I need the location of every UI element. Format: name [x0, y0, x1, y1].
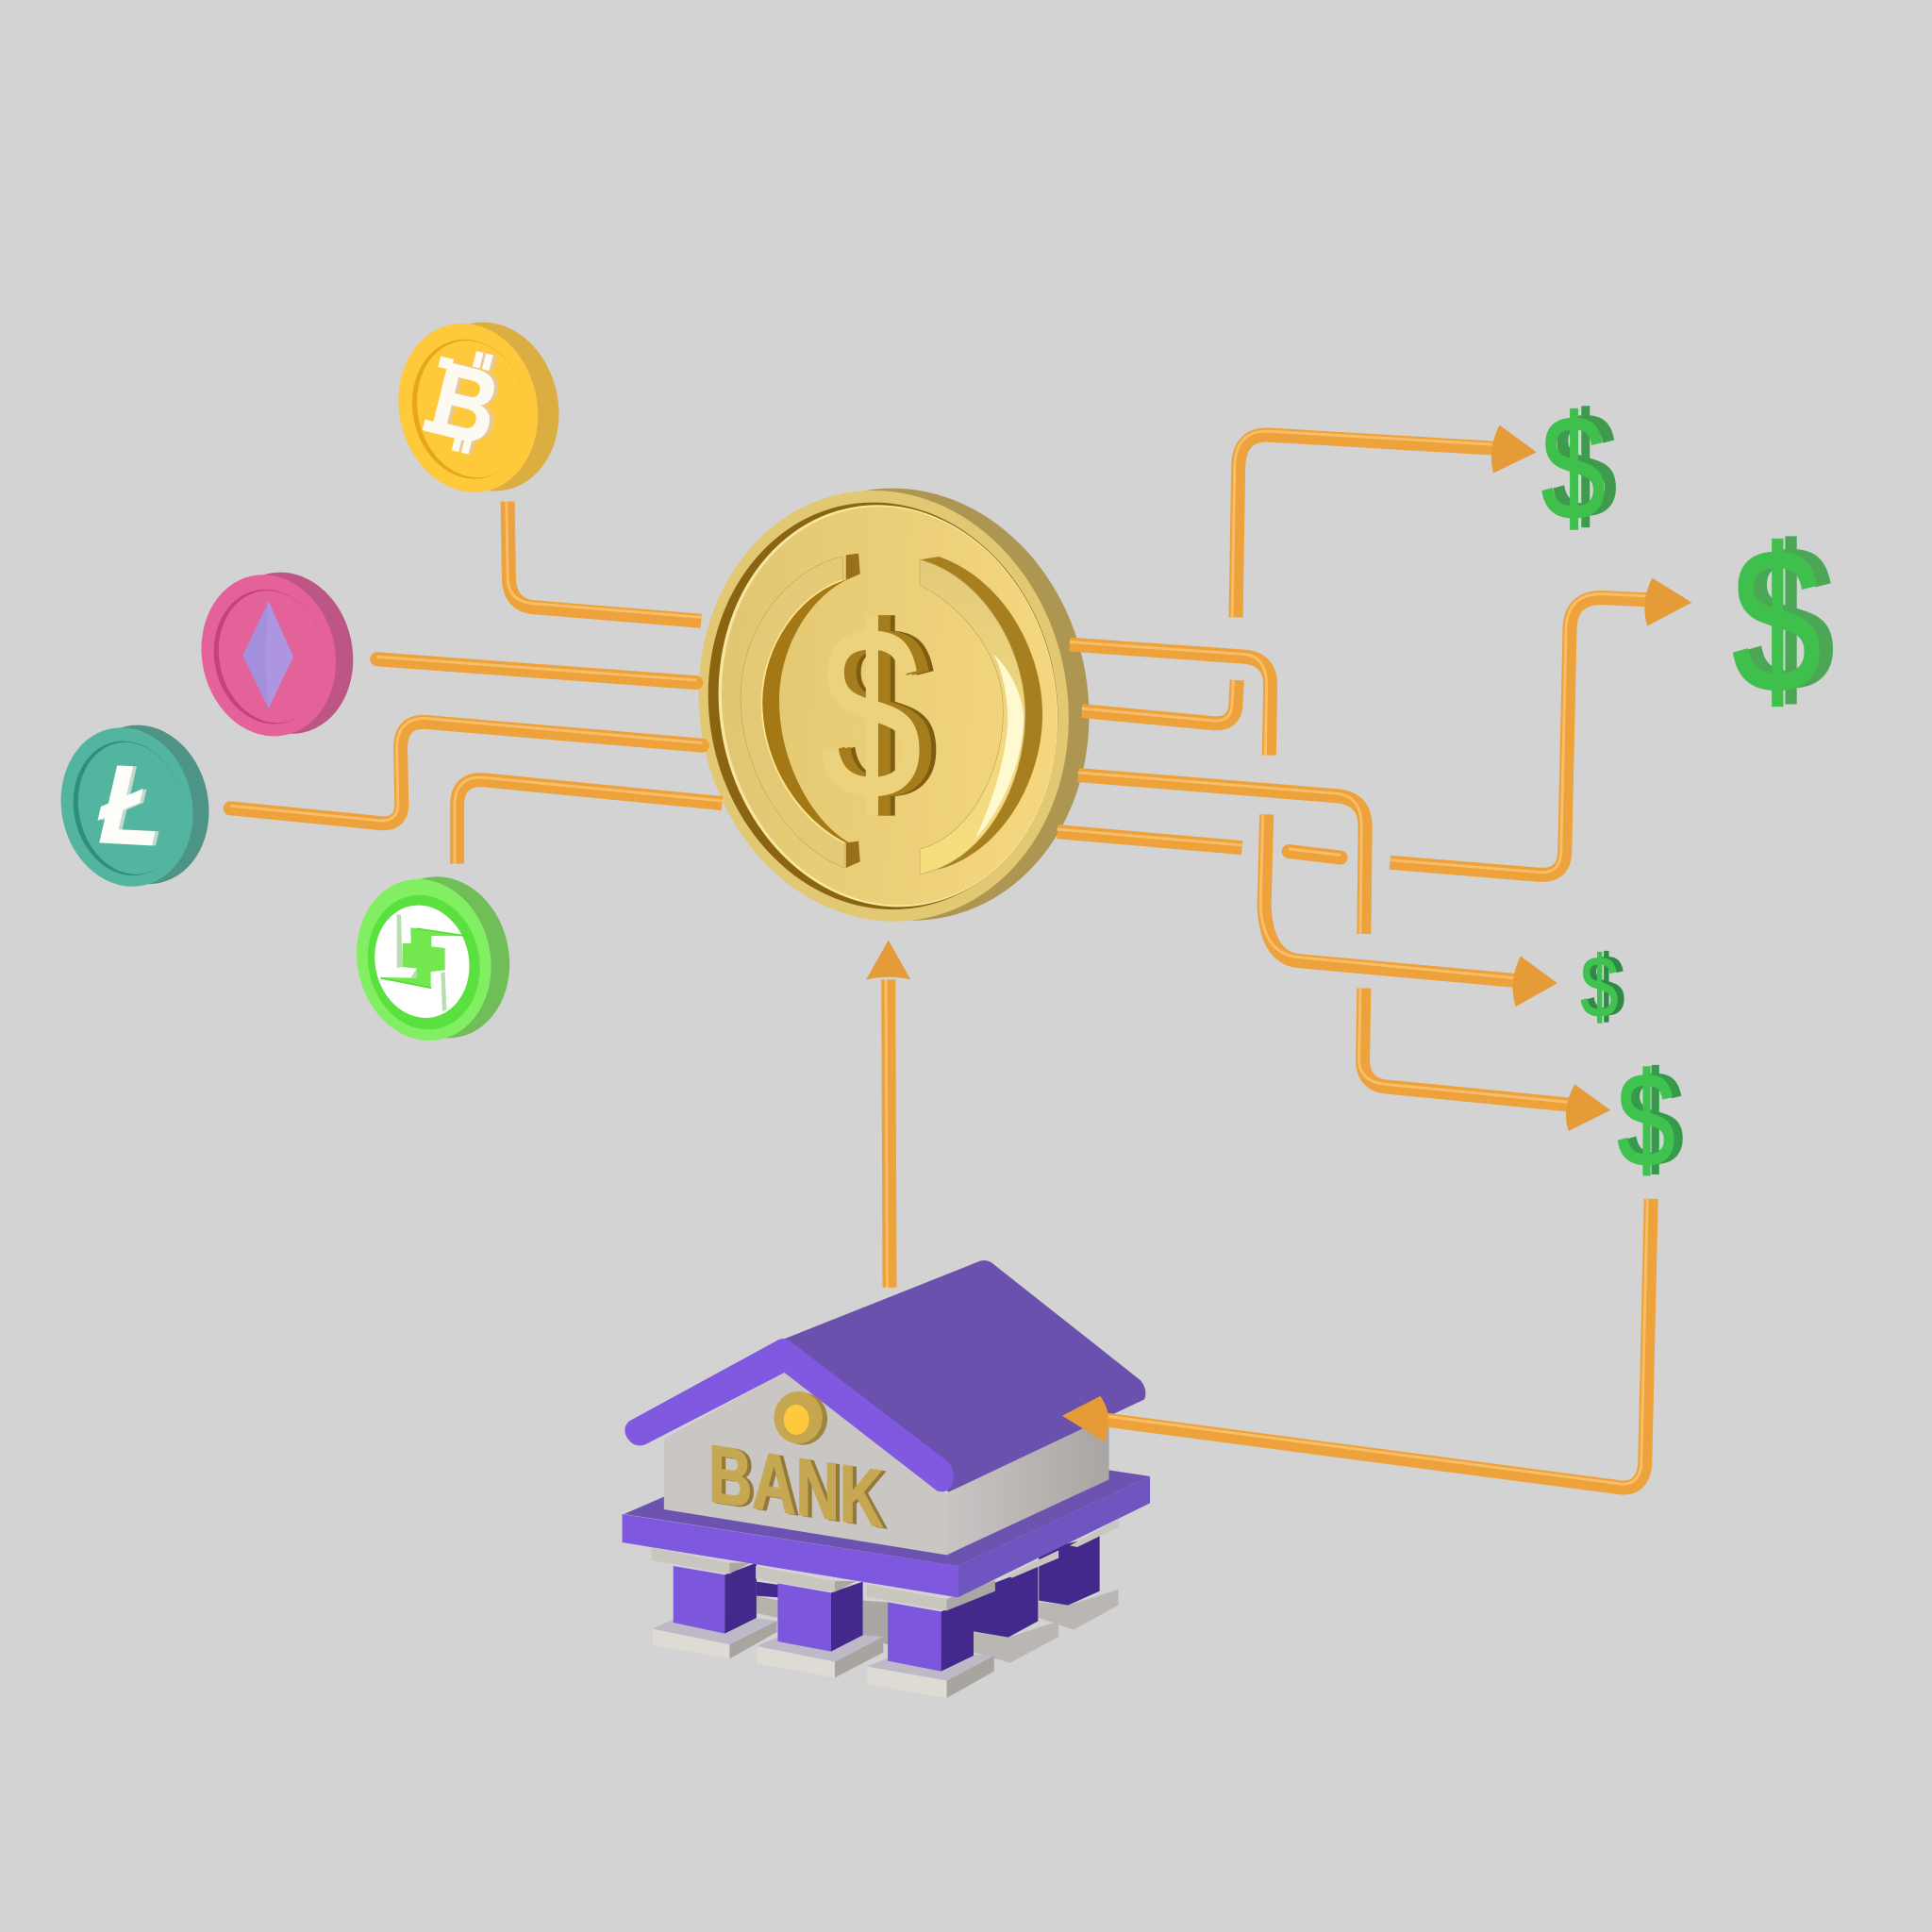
bank platform — [623, 1470, 1150, 1597]
ornament ring — [774, 1391, 827, 1445]
left arc — [741, 554, 860, 868]
dollar: top: $ — [1541, 385, 1606, 550]
bank structure — [623, 1260, 1150, 1698]
coin dollar sign: $ — [821, 576, 922, 850]
dollar: large: $ — [1732, 508, 1821, 736]
bank sign text: BANK — [708, 1428, 883, 1545]
dollar: medium: $ — [1626, 1043, 1684, 1192]
coin dollar sign: $ — [827, 576, 928, 850]
bitcoin symbol: B — [425, 340, 514, 467]
right arc — [920, 557, 1042, 874]
main dollar coin — [665, 458, 1123, 951]
litecoin symbol: Ł — [92, 742, 181, 868]
bank walls — [664, 1373, 1109, 1555]
dollar: top: $ — [1553, 383, 1617, 548]
bank sign text: BANK — [712, 1429, 887, 1546]
arrow heads — [866, 425, 1691, 1131]
dollar: small: $ — [1588, 939, 1624, 1034]
dollar sign outputs — [1541, 383, 1835, 1194]
coin edge — [682, 458, 1123, 950]
coin rim — [665, 461, 1103, 951]
pipes: coin inputs — [230, 502, 722, 864]
bank building — [623, 1260, 1150, 1698]
ethereum diamond — [242, 601, 293, 708]
front column one — [651, 1548, 777, 1658]
pipes: coin outputs — [1058, 431, 1654, 1106]
crypto coin: litecoin — [46, 712, 224, 899]
crypto coin: bitcoin — [383, 309, 575, 506]
bitcoin symbol: B — [421, 340, 510, 468]
coin dollar sign: $ — [838, 576, 939, 850]
pipe: bank to coin — [886, 979, 890, 1288]
dollar: small: $ — [1581, 940, 1618, 1036]
front column two — [756, 1566, 883, 1677]
crypto coin: green stablecoin — [341, 864, 525, 1053]
coin dollar sign: $ — [833, 576, 934, 850]
front column three — [867, 1580, 995, 1698]
rear columns — [757, 1519, 1119, 1663]
crypto coin: ethereum — [187, 559, 368, 749]
pipe: dollar back to bank — [1062, 1199, 1651, 1488]
bank roof — [625, 1260, 1145, 1492]
stablecoin symbol — [380, 914, 467, 1012]
dollar: medium: $ — [1617, 1044, 1675, 1194]
litecoin symbol: Ł — [89, 742, 177, 868]
dollar: large: $ — [1746, 505, 1835, 733]
